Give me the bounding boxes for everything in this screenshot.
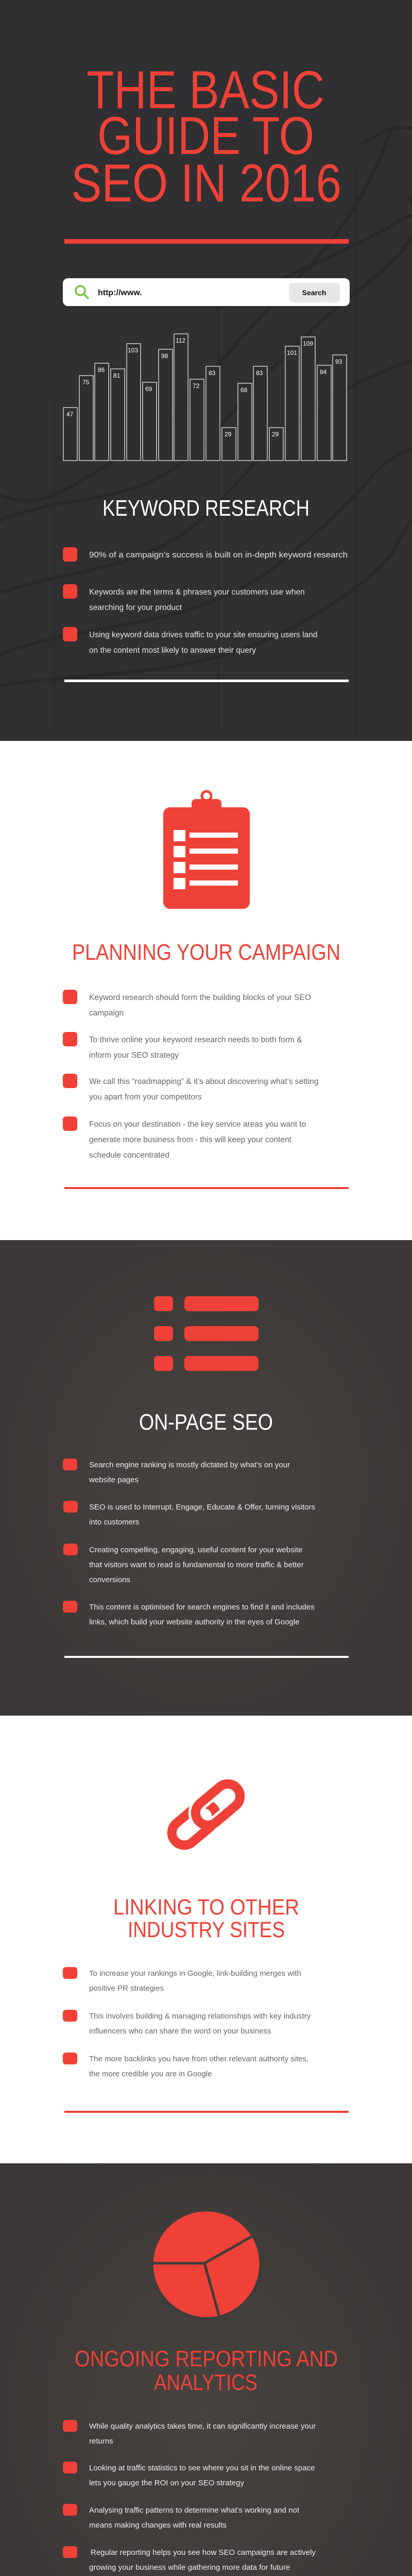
heading: keyword research: KEYWORD RESEARCH: [102, 496, 310, 521]
bullets: keyword research: 90% of a campaign’s success is built on in-depth keyword research: [89, 551, 348, 560]
bullets: linking: The more backlinks you have from other relevant authority sites,: [89, 2055, 308, 2063]
bar chart: keyword volume: 101: [287, 349, 297, 357]
bullets: ongoing: returns: [89, 2437, 113, 2446]
heading: linking: LINKING TO OTHER: [113, 1895, 299, 1920]
bullets: on-page: website pages: [89, 1476, 139, 1484]
heading: linking: [113, 1895, 299, 1942]
bullets: planning: schedule concentrated: [89, 1151, 169, 1160]
bullets: linking: [63, 1967, 311, 2078]
bullets: linking: influencers who can share the word on your business: [89, 2027, 271, 2036]
icon: clipboard: [163, 791, 250, 909]
bar chart: keyword volume: 93: [335, 358, 342, 365]
bullets: planning: campaign: [89, 1009, 124, 1018]
heading: planning your campaign: PLANNING YOUR CAMPAIGN: [72, 940, 340, 965]
bullets: ongoing: While quality analytics takes time, it can significantly increase your: [89, 2422, 316, 2431]
bullets: on-page: SEO is used to Interrupt, Engage, Educate & Offer, turning visitors: [89, 1503, 315, 1512]
bullets: linking: To increase your rankings in Google, link-building merges with: [89, 1969, 301, 1978]
bullets: keyword research: on the content most likely to answer their query: [89, 646, 256, 655]
bar chart: keyword volume: 47: [66, 411, 74, 418]
search button: [289, 283, 340, 302]
heading: linking: INDUSTRY SITES: [128, 1918, 285, 1942]
bullets: on-page: Search engine ranking is mostly dictated by what’s on your: [89, 1461, 290, 1469]
bar chart: keyword volume: 86: [98, 366, 105, 374]
panel: linking to other industry sites: [0, 1716, 412, 2163]
bullets: linking: positive PR strategies: [89, 1984, 164, 1993]
search button: Search: [302, 289, 326, 297]
bullets: planning: inform your SEO strategy: [89, 1051, 179, 1060]
bullets: planning: Keyword research should form the building blocks of your SEO: [89, 993, 311, 1002]
icon: list: [154, 1296, 259, 1371]
bullets: keyword research: Keywords are the terms & phrases your customers use when: [89, 588, 305, 597]
title: SEO IN 2016: [71, 154, 341, 213]
bullets: planning: We call this “roadmapping” & it’s about discovering what’s setting: [89, 1077, 318, 1086]
bar chart: keyword volume: [63, 334, 347, 461]
heading: on-page seo: ON-PAGE SEO: [139, 1410, 273, 1435]
bullets: ongoing: lets you gauge the ROI on your SEO strategy: [89, 2479, 244, 2487]
bullets: on-page: into customers: [89, 1518, 140, 1527]
bullets: ongoing: [63, 2420, 316, 2576]
heading: ongoing reporting: ONGOING REPORTING AND: [75, 2346, 338, 2371]
bar chart: keyword volume: 83: [256, 369, 263, 377]
title underline: [64, 239, 349, 244]
panel: header + keyword research: [0, 0, 412, 741]
bullets: ongoing: means making changes with real results: [89, 2521, 227, 2530]
bullets: linking: the more credible you are in Google: [89, 2070, 212, 2078]
bullets: planning: [63, 990, 318, 1160]
bar chart: keyword volume: 84: [320, 368, 327, 376]
bullets: on-page: This content is optimised for search engines to find it and includes: [89, 1603, 315, 1612]
bullets: planning: you apart from your competitors: [89, 1093, 202, 1101]
bar chart: keyword volume: 112: [176, 337, 185, 344]
panel: planning your campaign: [0, 741, 412, 1240]
title: [71, 60, 341, 213]
bullets: linking: This involves building & managing relationships with key industry: [89, 2012, 311, 2021]
bullets: on-page: that visitors want to read is fundamental to more traffic & better: [89, 1561, 304, 1569]
bar chart: keyword volume: 81: [113, 372, 121, 379]
bar chart: keyword volume: 98: [161, 352, 168, 360]
heading: ongoing reporting: ANALYTICS: [154, 2370, 258, 2395]
bar chart: keyword volume: 29: [225, 431, 232, 438]
search bar: [63, 278, 350, 306]
panel: ongoing reporting and analytics: [0, 2163, 412, 2576]
bullets: keyword research: [63, 547, 348, 655]
bullets: ongoing: Analysing traffic patterns to determine what’s working and not: [89, 2506, 299, 2515]
bullets: on-page: conversions: [89, 1575, 130, 1584]
icon: pie chart: [152, 2210, 261, 2318]
bar chart: keyword volume: 69: [145, 385, 152, 393]
bullets: on-page: Creating compelling, engaging, useful content for your website: [89, 1546, 302, 1554]
panel: on-page seo: [0, 1240, 412, 1716]
bar chart: keyword volume: 29: [272, 431, 279, 438]
icon: magnifier: [76, 286, 89, 299]
bar chart: keyword volume: 83: [209, 369, 216, 377]
bar chart: keyword volume: 68: [241, 386, 248, 394]
bullets: planning: Focus on your destination - the key service areas you want to: [89, 1120, 306, 1129]
heading: ongoing reporting: [75, 2346, 338, 2395]
bullets: on-page: [63, 1459, 315, 1626]
bullets: on-page: links, which build your website authority in the eyes of Google: [89, 1618, 300, 1626]
icon: chain link: [167, 1779, 245, 1850]
search bar: http://www.: [98, 289, 142, 297]
bullets: keyword research: searching for your product: [89, 603, 182, 612]
bar chart: keyword volume: 75: [82, 379, 90, 386]
bar chart: keyword volume: 103: [128, 347, 138, 354]
bullets: ongoing: Regular reporting helps you see how SEO campaigns are actively: [91, 2548, 316, 2557]
bar chart: keyword volume: 109: [303, 340, 313, 347]
bullets: planning: To thrive online your keyword research needs to both form &: [89, 1036, 302, 1044]
bar chart: keyword volume: 72: [193, 382, 200, 389]
title: GUIDE TO: [97, 106, 314, 166]
bullets: keyword research: Using keyword data drives traffic to your site ensuring users land: [89, 631, 317, 639]
bullets: ongoing: Looking at traffic statistics to see where you sit in the online space: [89, 2464, 315, 2472]
bullets: planning: generate more business from - this will keep your content: [89, 1136, 292, 1144]
title: THE BASIC: [87, 60, 324, 120]
bullets: ongoing: growing your business while gathering more data for future: [89, 2563, 290, 2572]
